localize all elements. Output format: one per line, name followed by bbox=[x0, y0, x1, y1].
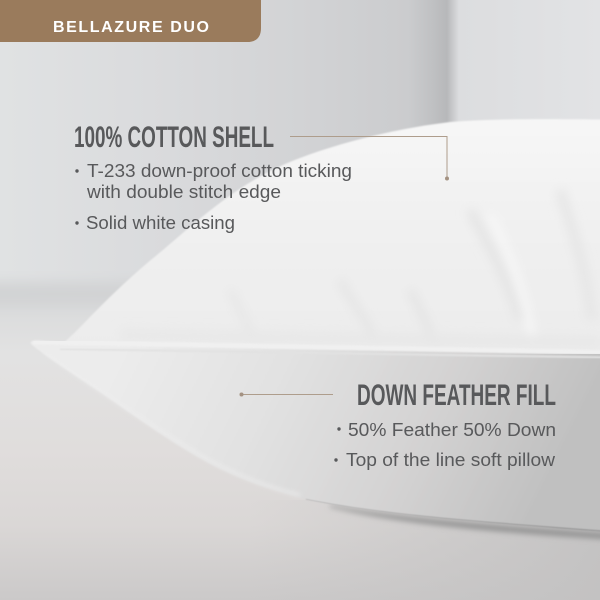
bullet list: cotton shell bbox=[75, 161, 352, 233]
pillow upper body bbox=[60, 119, 600, 370]
leader dot: cotton shell bbox=[445, 176, 449, 180]
pillow seam bbox=[33, 342, 600, 353]
pillow front flange bbox=[31, 340, 600, 533]
bullet list: cotton shell: Solid white casing bbox=[86, 213, 235, 233]
leader dot: down feather fill bbox=[240, 392, 244, 396]
callout: cotton shell bbox=[74, 121, 449, 233]
bullet list: cotton shell: with double stitch edge bbox=[86, 182, 281, 202]
pillow shadow bbox=[330, 505, 600, 540]
pillow lower edge highlight bbox=[45, 352, 300, 495]
heading: cotton shell: 100% COTTON SHELL bbox=[74, 121, 274, 154]
bullet list: down feather fill: 50% Feather 50% Down bbox=[348, 420, 556, 440]
brand tab bbox=[0, 0, 261, 42]
bullet list: down feather fill bbox=[334, 420, 556, 470]
bullet list: cotton shell: T-233 down-proof cotton ticking bbox=[87, 161, 352, 181]
pillow wrinkles bbox=[120, 190, 600, 348]
leader line: cotton shell bbox=[290, 136, 447, 178]
brand name: BELLAZURE DUO bbox=[53, 19, 209, 36]
bullet list: down feather fill: Top of the line soft pillow bbox=[346, 450, 556, 470]
leader line: down feather fill bbox=[241, 394, 333, 396]
pillow bbox=[31, 119, 600, 540]
callout: down feather fill bbox=[240, 379, 556, 470]
